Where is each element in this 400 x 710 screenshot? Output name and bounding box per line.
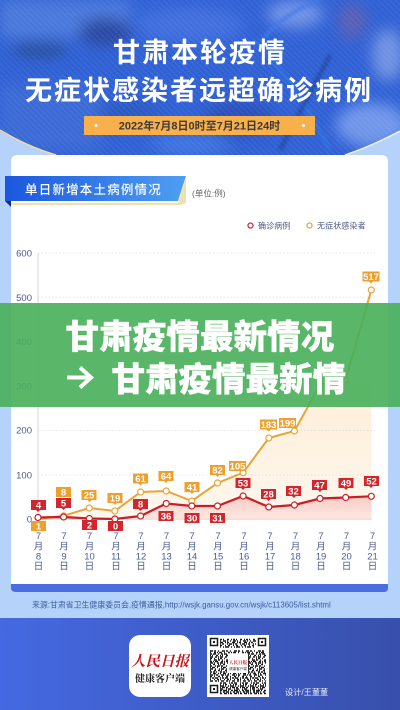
logo: people's daily health client: 健康客户端 [135,672,185,685]
y axis labels: 0 [27,514,32,526]
x axis labels: 月 [239,542,249,552]
x axis labels: 日 [342,562,351,572]
x axis labels: 月 [162,542,171,552]
confirmed value labels: 28 [263,490,274,500]
x axis labels: 8 [36,552,41,562]
asymptomatic value labels: 199 [280,418,295,430]
green overlay banner: 甘肃疫情最新情况 [66,320,335,356]
unit note: (单位:例) [192,188,226,198]
x axis labels: 日 [34,562,43,572]
x axis labels: 月 [213,542,223,552]
card bottom bar [11,584,388,592]
x axis labels: 7 [138,531,144,542]
asymptomatic value labels: 61 [135,474,146,485]
asymptomatic value labels: 19 [110,494,120,504]
asymptomatic value labels: 517 [363,272,379,283]
confirmed value labels: 5 [61,498,67,510]
asymptomatic value labels: 41 [187,482,198,494]
x axis labels: 月 [342,542,351,552]
x axis labels: 日 [291,562,300,572]
confirmed value labels: 53 [238,478,248,490]
x axis labels: 月 [136,542,146,552]
x axis labels: 日 [136,562,146,572]
x axis labels: 月 [85,542,94,552]
x axis labels: 日 [239,562,249,572]
x axis labels: 7 [293,531,298,542]
x axis labels: 日 [187,562,197,572]
QR code: 人民日报 [229,659,247,666]
confirmed value labels: 32 [288,486,299,498]
legend: 确诊病例 [258,220,290,230]
y axis labels: 200 [16,426,32,436]
x axis labels: 7 [164,531,169,542]
x axis labels: 9 [61,552,67,562]
x axis labels: 日 [213,562,223,572]
x axis labels: 日 [368,562,377,572]
legend [248,220,366,230]
x axis labels: 21 [367,552,378,562]
green overlay banner [0,303,400,407]
confirmed value labels: 8 [138,500,143,510]
legend: 无症状感染者 [317,220,366,230]
confirmed value labels: 36 [161,512,171,522]
confirmed value labels: 2 [87,520,92,532]
y axis labels: 600 [16,248,32,260]
x axis labels: 日 [265,562,275,572]
x axis labels: 12 [136,552,146,562]
x axis labels [34,531,378,572]
gridlines and axis [38,253,375,519]
confirmed value labels: 47 [314,480,325,492]
confirmed value labels: 49 [341,478,351,490]
x axis labels: 7 [344,531,349,542]
y axis labels: 500 [16,293,32,304]
header photo background [0,0,400,160]
asymptomatic value labels: 183 [261,420,276,431]
x axis labels: 13 [161,552,172,562]
asymptomatic value labels: 82 [212,466,223,476]
x axis labels: 14 [187,552,197,562]
x axis labels: 日 [316,562,326,572]
x axis labels: 日 [59,562,69,572]
confirmed line [35,493,374,522]
x axis labels: 月 [187,542,197,552]
designer credit: 设计/王董董 [285,687,328,697]
x axis labels: 月 [368,542,377,552]
footer band [0,618,400,710]
x axis labels: 17 [265,552,275,562]
QR code: 健康客户端 [229,666,247,671]
chart [16,248,380,572]
x axis labels: 19 [316,552,326,562]
confirmed value labels: 30 [187,514,197,524]
confirmed value labels: 31 [212,514,223,524]
x axis labels: 月 [265,542,275,552]
white chart card [11,155,388,591]
x axis labels: 7 [241,531,247,542]
x axis labels: 18 [290,552,301,562]
title [25,38,373,106]
x axis labels: 7 [267,531,273,542]
x axis labels: 10 [84,552,95,562]
x axis labels: 7 [36,531,41,542]
x axis labels: 日 [162,562,171,572]
x axis labels: 15 [213,552,223,562]
x axis labels: 11 [111,552,121,562]
asymptomatic value labels: 25 [84,490,95,502]
date pill [84,116,315,135]
header curved edges [0,130,400,155]
section ribbon heading [5,176,186,207]
y axis labels [16,248,32,526]
x axis labels: 7 [215,531,221,542]
asymptomatic value labels: 105 [230,462,246,472]
asymptomatic line [38,287,374,519]
green overlay banner: 甘肃疫情最新情 [112,362,346,399]
confirmed area [38,496,371,519]
asymptomatic value labels [31,272,380,532]
y axis labels: 300 [16,382,32,392]
asymptomatic value labels: 1 [36,522,42,532]
logo: people's daily health client [129,635,191,697]
QR code [207,635,269,697]
x axis labels: 7 [189,531,195,542]
x axis labels: 月 [291,542,300,552]
x axis labels: 日 [111,562,121,572]
x axis labels: 7 [370,531,375,542]
asymptomatic value labels: 8 [61,488,66,498]
confirmed value labels [31,476,379,532]
x axis labels: 月 [111,542,121,552]
x axis labels: 月 [59,542,69,552]
logo: people's daily health client: 人民日报 [131,653,190,670]
x axis labels: 7 [61,531,67,542]
title: 无症状感染者远超确诊病例 [25,75,373,106]
x axis labels: 20 [341,552,352,562]
x axis labels: 7 [113,531,119,542]
x axis labels: 月 [34,542,43,552]
x axis labels: 16 [239,552,249,562]
y axis labels: 100 [16,470,32,482]
confirmed value labels: 4 [36,500,42,512]
y axis labels: 400 [16,337,32,348]
asymptomatic value labels: 64 [161,472,172,482]
confirmed value labels: 0 [113,522,118,532]
x axis labels: 月 [316,542,326,552]
x axis labels: 7 [87,531,92,542]
x axis labels: 日 [85,562,94,572]
asymptomatic area [38,290,371,519]
section ribbon heading: 单日新增本土病例情况 [25,182,162,197]
confirmed value labels: 52 [366,476,377,488]
x axis labels: 7 [318,531,324,542]
date pill: 2022年7月8日0时至7月21日24时 [119,118,280,132]
title: 甘肃本轮疫情 [113,38,287,68]
source note: 来源:甘肃省卫生健康委员会,疫情通报,http://wsjk.gansu.gov.cn/wsjk/c113605/list.shtml [32,600,331,610]
